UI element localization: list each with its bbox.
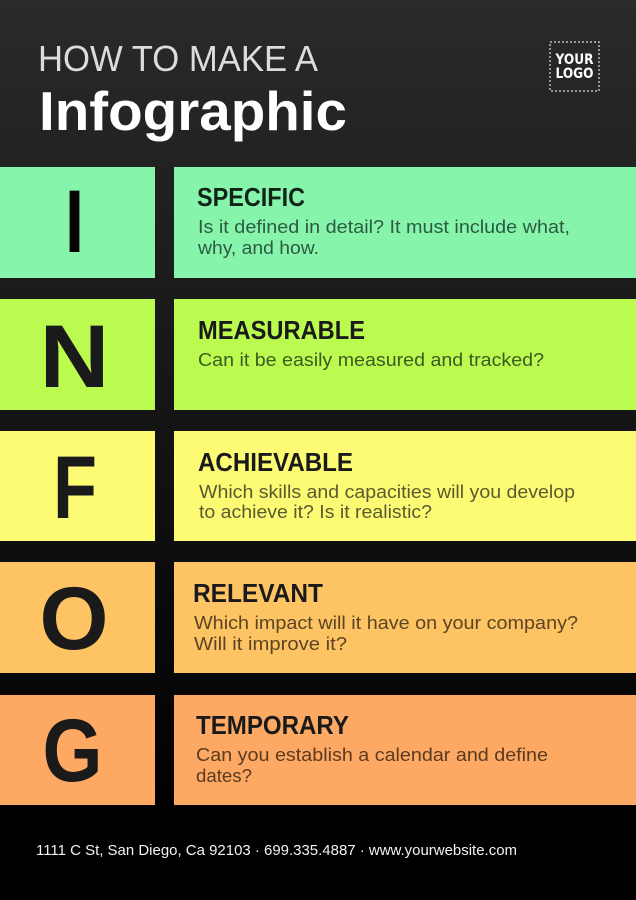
logo placeholder: LOGO xyxy=(556,66,594,82)
panel: achievable: Which skills and capacities will you develop xyxy=(199,481,575,502)
letter tile N xyxy=(0,299,155,410)
panel: temporary: dates? xyxy=(196,765,252,786)
panel: temporary xyxy=(174,695,636,805)
panel: temporary: Can you establish a calendar and define xyxy=(196,744,548,765)
letter tile G: G xyxy=(42,700,102,800)
panel: temporary: TEMPORARY xyxy=(196,710,349,740)
panel: specific xyxy=(174,167,636,278)
title line: how to make a: HOW TO MAKE A xyxy=(38,38,318,79)
row: temporary xyxy=(0,695,636,805)
letter tile O xyxy=(0,562,155,673)
logo placeholder xyxy=(550,42,599,91)
letter tile I: I xyxy=(65,171,84,271)
title xyxy=(38,38,347,142)
panel: specific: Is it defined in detail? It must include what, xyxy=(198,216,570,237)
panel: achievable xyxy=(174,431,636,541)
letter tile I xyxy=(0,167,155,278)
panel: specific: why, and how. xyxy=(197,237,319,258)
footer contact line: 1111 C St, San Diego, Ca 92103 · 699.335.4887 · www.yourwebsite.com xyxy=(36,842,517,859)
panel: measurable: Can it be easily measured and tracked? xyxy=(198,349,544,370)
panel: measurable xyxy=(174,299,636,410)
letter tile O: O xyxy=(40,568,108,668)
logo placeholder: YOUR xyxy=(555,52,594,68)
panel: specific: SPECIFIC xyxy=(197,182,305,212)
panel: relevant xyxy=(174,562,636,673)
panel: relevant: RELEVANT xyxy=(193,578,323,608)
row: specific xyxy=(0,167,636,278)
letter tile N: N xyxy=(40,306,110,406)
title line: infographic: Infographic xyxy=(39,80,347,142)
panel: achievable: to achieve it? Is it realistic? xyxy=(199,501,432,522)
letter tile F: F xyxy=(53,437,97,537)
letter tile F xyxy=(0,431,155,541)
row: measurable xyxy=(0,299,636,410)
panel: relevant: Which impact will it have on your company? xyxy=(194,612,578,633)
row: relevant xyxy=(0,562,636,673)
letter tile G xyxy=(0,695,155,805)
panel: relevant: Will it improve it? xyxy=(194,633,347,654)
panel: achievable: ACHIEVABLE xyxy=(198,447,353,477)
panel: measurable: MEASURABLE xyxy=(198,315,365,345)
row: achievable xyxy=(0,431,636,541)
